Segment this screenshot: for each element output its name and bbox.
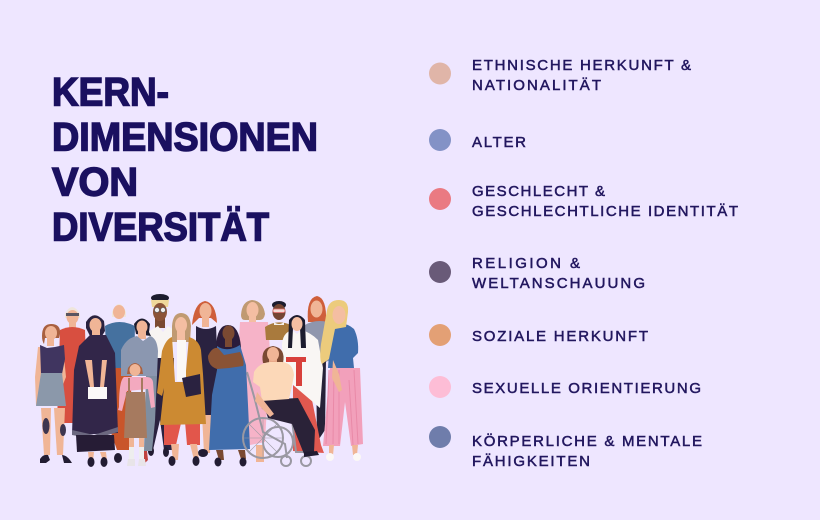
- legend: Religion: [429, 255, 645, 292]
- legend: Religion: RELIGION &: [472, 255, 580, 272]
- person: woman in grey sweater: [121, 318, 158, 464]
- legend: Geschlecht: GESCHLECHTLICHE IDENTITÄT: [472, 203, 738, 220]
- person: woman in long dark coat holding white book: [72, 315, 118, 467]
- person: man with glasses and mustard shirt, back row: [265, 301, 293, 340]
- title: KERN-: [52, 70, 169, 114]
- legend: Geschlecht: GESCHLECHT &: [472, 183, 605, 200]
- legend: Religion: WELTANSCHAUUNG: [472, 275, 645, 292]
- legend: Geschlecht: [429, 183, 738, 220]
- legend: sexuelle Orientierung: SEXUELLE ORIENTIERUNG: [472, 380, 701, 397]
- person: blonde woman in blue sweater with striped trousers: [320, 300, 363, 461]
- wheelchair: [243, 372, 311, 466]
- person: red dress woman, back row: [57, 307, 86, 423]
- person: woman with black hair, white coat and red skirt: [282, 315, 324, 453]
- title: DIVERSITÄT: [52, 206, 269, 250]
- legend: soziale Herkunft: [429, 324, 648, 346]
- person: woman in long blue dress with crossed arms: [208, 325, 250, 466]
- title: [52, 70, 318, 250]
- person: red-haired woman in dark tank, back row: [192, 301, 219, 457]
- legend: ethnische Herkunft: [429, 57, 691, 94]
- person: blue top with orange trousers, back row: [105, 304, 135, 463]
- person: girl in brown pinafore dress: [118, 363, 155, 466]
- legend: ethnische Herkunft: NATIONALITÄT: [472, 77, 601, 94]
- legend: Alter: ALTER: [472, 134, 526, 151]
- person: red-haired woman in grey top, back row: [305, 296, 330, 442]
- legend: körperliche und mentale Fähigkeiten: KÖRPERLICHE & MENTALE: [472, 432, 702, 450]
- person: woman in pink, back row: [238, 300, 270, 462]
- legend: körperliche und mentale Fähigkeiten: FÄHIGKEITEN: [472, 453, 590, 470]
- legend: soziale Herkunft: SOZIALE HERKUNFT: [472, 328, 648, 345]
- person: man with glasses and white shirt, back row: [148, 294, 174, 457]
- legend: sexuelle Orientierung: [429, 376, 701, 398]
- legend: Alter: [429, 129, 526, 151]
- person: woman in wheelchair with cream top: [243, 346, 319, 466]
- person: woman in mustard coat with red trousers and black bag: [157, 313, 206, 466]
- title: VON: [52, 160, 138, 204]
- person: woman with tank top and skirt, front left: [35, 324, 72, 463]
- title: DIMENSIONEN: [52, 116, 318, 160]
- illustration: diverse group of people: [35, 294, 363, 467]
- legend: körperliche und mentale Fähigkeiten: [429, 426, 702, 470]
- legend: ethnische Herkunft: ETHNISCHE HERKUNFT &: [472, 57, 691, 74]
